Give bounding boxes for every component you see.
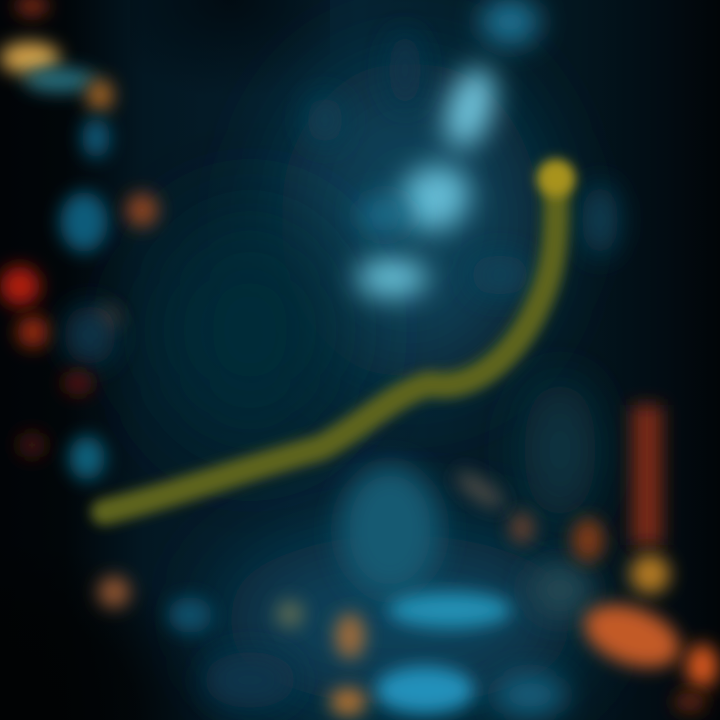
rising trend line [104, 159, 575, 512]
lower orange lights [276, 405, 718, 716]
trend line end point [537, 159, 575, 197]
central light streak [307, 0, 618, 298]
floor reflections [168, 465, 592, 717]
left column of lights [0, 0, 158, 608]
